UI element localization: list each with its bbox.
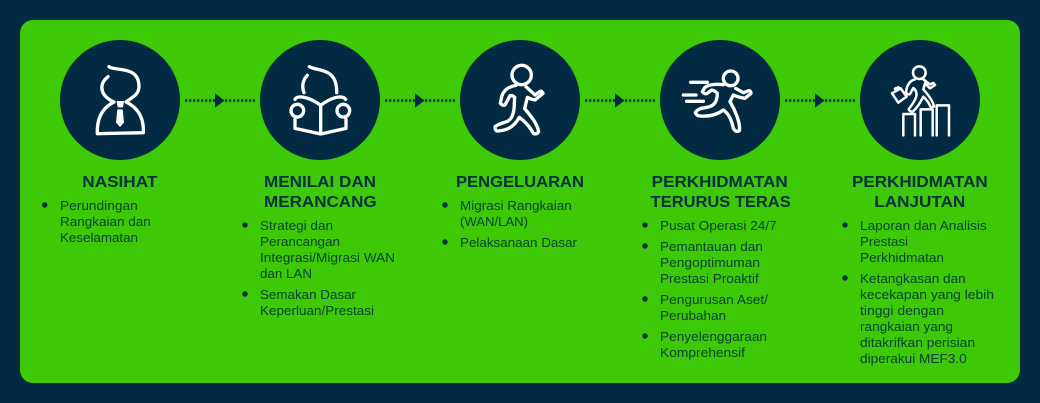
list: Perkhidmatan Terurus Teras items: Pemantauan dan: [660, 239, 763, 254]
list: Perkhidmatan Lanjutan items: tinggi dengan: [860, 303, 944, 318]
list: Nasihat items: [42, 198, 151, 245]
list: Perkhidmatan Lanjutan items: Prestasi: [860, 234, 908, 249]
heading: Perkhidmatan Terurus Teras: PERKHIDMATAN: [652, 174, 788, 191]
heading: Nasihat: NASIHAT: [82, 174, 158, 191]
heading: Perkhidmatan Terurus Teras: TERURUS TERAS: [651, 194, 791, 211]
list: Perkhidmatan Lanjutan items: [842, 218, 994, 366]
icon: running person with speed lines: [660, 40, 780, 160]
step 1: Nasihat: [42, 40, 180, 245]
list: Menilai dan Merancang items: dan LAN: [260, 266, 312, 281]
heading: Perkhidmatan Lanjutan: [852, 174, 988, 211]
list: Perkhidmatan Lanjutan items: diperakui MEF3.0: [860, 351, 967, 366]
list: Menilai dan Merancang items: Perancangan: [260, 234, 340, 249]
list: Menilai dan Merancang items: Strategi dan: [260, 218, 333, 233]
list: Perkhidmatan Terurus Teras items: Komprehensif: [660, 345, 745, 360]
icon: advisor with tie: [60, 40, 180, 160]
list: Perkhidmatan Terurus Teras items: Pengurusan Aset/: [660, 292, 768, 307]
list: Nasihat items: Perundingan: [60, 198, 138, 213]
list: Perkhidmatan Terurus Teras items: Prestasi Proaktif: [660, 271, 759, 286]
list: Perkhidmatan Terurus Teras items: Penyelenggaraan: [660, 329, 767, 344]
icon: businessman climbing steps: [860, 40, 980, 160]
list: Menilai dan Merancang items: Semakan Dasar: [260, 287, 357, 302]
icon: person reading book: [260, 40, 380, 160]
list: Pengeluaran items: Pelaksanaan Dasar: [460, 235, 578, 250]
step 5: Perkhidmatan Lanjutan: [842, 40, 994, 366]
list: Perkhidmatan Lanjutan items: kecekapan yang lebih: [860, 287, 994, 302]
arrow 2: [385, 93, 455, 108]
heading: Perkhidmatan Lanjutan: PERKHIDMATAN: [852, 174, 988, 191]
heading: Menilai dan Merancang: MERANCANG: [264, 194, 377, 211]
list: Perkhidmatan Lanjutan items: rangkaian yang: [860, 319, 953, 334]
step 2: Menilai dan Merancang: [242, 40, 395, 318]
list: Perkhidmatan Lanjutan items: ditakrifkan perisian: [860, 335, 975, 350]
heading: Menilai dan Merancang: [264, 174, 377, 211]
icon: walking person: [460, 40, 580, 160]
list: Pengeluaran items: [442, 198, 578, 250]
list: Menilai dan Merancang items: Integrasi/Migrasi WAN: [260, 250, 395, 265]
list: Pengeluaran items: (WAN/LAN): [460, 214, 528, 229]
list: Menilai dan Merancang items: Keperluan/Prestasi: [260, 303, 374, 318]
step 4: Perkhidmatan Terurus Teras: [642, 40, 791, 360]
list: Perkhidmatan Terurus Teras items: [642, 218, 777, 360]
list: Perkhidmatan Terurus Teras items: Pusat Operasi 24/7: [660, 218, 777, 233]
arrow 3: [585, 93, 655, 108]
arrow 4: [785, 93, 855, 108]
heading: Perkhidmatan Terurus Teras: [651, 174, 791, 211]
step 3: Pengeluaran: [442, 40, 584, 250]
list: Perkhidmatan Terurus Teras items: Perubahan: [660, 308, 726, 323]
heading: Perkhidmatan Lanjutan: LANJUTAN: [874, 194, 965, 211]
list: Menilai dan Merancang items: [242, 218, 395, 318]
list: Pengeluaran items: Migrasi Rangkaian: [460, 198, 572, 213]
list: Nasihat items: Rangkaian dan: [60, 214, 151, 229]
list: Perkhidmatan Lanjutan items: Laporan dan Analisis: [860, 218, 987, 233]
list: Perkhidmatan Lanjutan items: Ketangkasan dan: [860, 271, 966, 286]
list: Perkhidmatan Lanjutan items: Perkhidmatan: [860, 250, 944, 265]
arrow 1: [185, 93, 255, 108]
heading: Menilai dan Merancang: MENILAI DAN: [264, 174, 376, 191]
heading: Pengeluaran: PENGELUARAN: [456, 174, 584, 191]
list: Perkhidmatan Terurus Teras items: Pengoptimuman: [660, 255, 760, 270]
list: Nasihat items: Keselamatan: [60, 230, 138, 245]
